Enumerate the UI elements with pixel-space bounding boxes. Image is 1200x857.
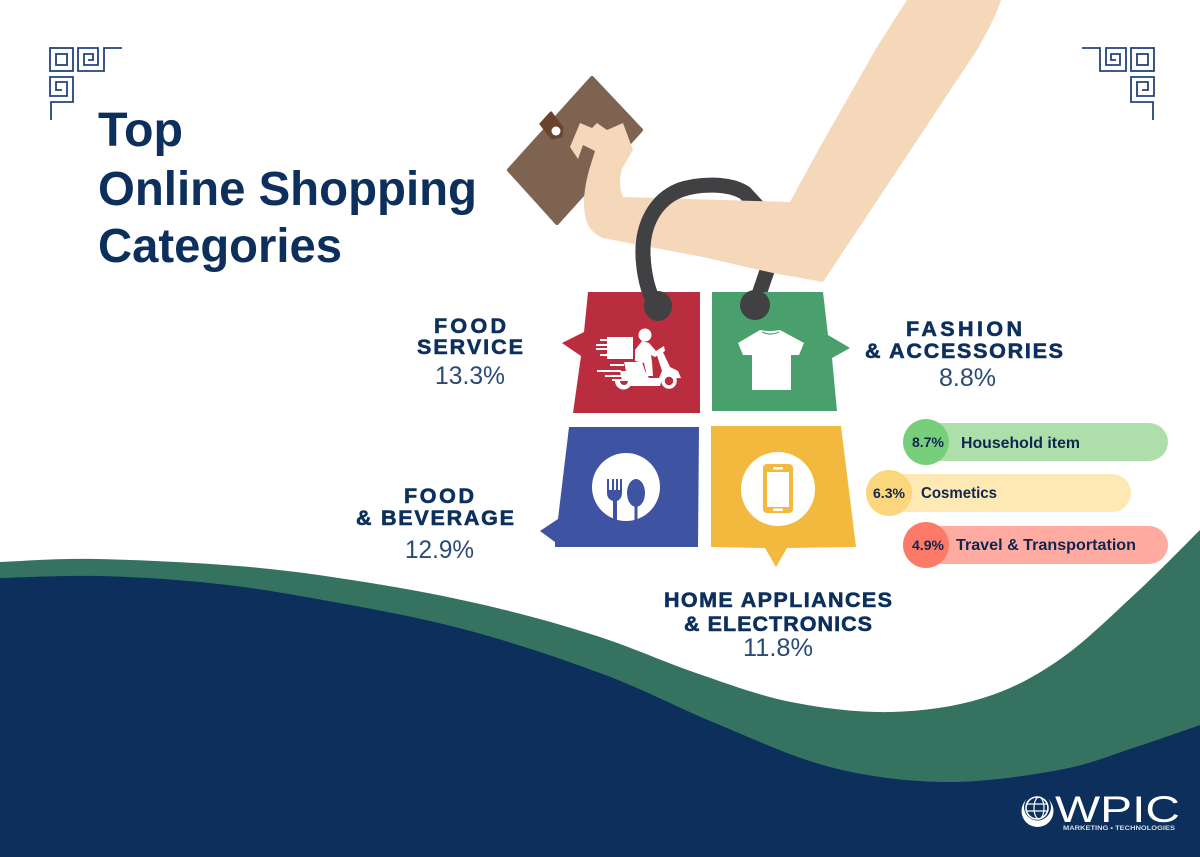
label: food and beverage: 12.9% [405, 536, 474, 564]
label: food service: SERVICE [417, 335, 523, 359]
pill: travel and transportation [903, 522, 1168, 568]
label: food and beverage: FOOD [404, 484, 474, 508]
pill: household item: 8.7% [912, 435, 944, 450]
title: Online Shopping [98, 163, 477, 216]
pill: cosmetics [866, 470, 1131, 516]
label: fashion and accessories [865, 317, 1063, 392]
arm and hand [570, 0, 1001, 282]
pill: cosmetics: Cosmetics [921, 485, 997, 502]
label: food service: FOOD [434, 314, 506, 338]
label: home appliances and electronics: 11.8% [743, 634, 813, 662]
icon: globe [1022, 794, 1054, 827]
icon: fork and spoon [592, 453, 660, 521]
pill: travel and transportation: Travel & Transportation [956, 537, 1136, 554]
logo: WPIC [1022, 789, 1180, 832]
pill: cosmetics: 6.3% [873, 486, 905, 501]
label: food service: 13.3% [435, 362, 505, 390]
label: fashion and accessories: 8.8% [939, 364, 996, 392]
icon: wallet [509, 78, 641, 223]
icon: smartphone [741, 452, 815, 526]
bag handle, arc behind arm [643, 185, 772, 305]
label: food service [417, 314, 523, 390]
background wave: green [0, 530, 1200, 857]
label: home appliances and electronics [664, 588, 892, 662]
bag handle, front strand over arm [635, 180, 685, 301]
title: Categories [98, 220, 342, 273]
panel: fashion tile [712, 292, 850, 411]
background wave: navy [0, 576, 1200, 857]
label: fashion and accessories: & ACCESSORIES [865, 339, 1063, 363]
panel: home appliances tile [711, 426, 856, 567]
logo: WPIC: MARKETING • TECHNOLOGIES [1063, 825, 1176, 832]
label: fashion and accessories: FASHION [906, 317, 1022, 341]
ornament: top-right corner meander [1082, 48, 1154, 120]
pill: household item [903, 419, 1168, 465]
ornament: top-left corner meander [50, 48, 122, 120]
pill: household item: Household item [961, 435, 1080, 452]
bag handle, right stub [756, 268, 768, 303]
bag handle blobs [644, 290, 770, 321]
logo: WPIC: WPIC [1055, 789, 1180, 830]
panel: food and beverage tile [540, 427, 699, 547]
icon: t-shirt [738, 330, 804, 390]
label: home appliances and electronics: HOME APPLIANCES [664, 588, 892, 612]
label: food and beverage: & BEVERAGE [356, 506, 514, 530]
label: food and beverage [356, 484, 514, 564]
label: home appliances and electronics: & ELECTRONICS [684, 612, 872, 636]
title: Top [98, 104, 183, 157]
title [98, 104, 477, 273]
pill: travel and transportation: 4.9% [912, 538, 944, 553]
icon: delivery scooter [596, 328, 681, 390]
panel: food service tile [562, 292, 700, 413]
